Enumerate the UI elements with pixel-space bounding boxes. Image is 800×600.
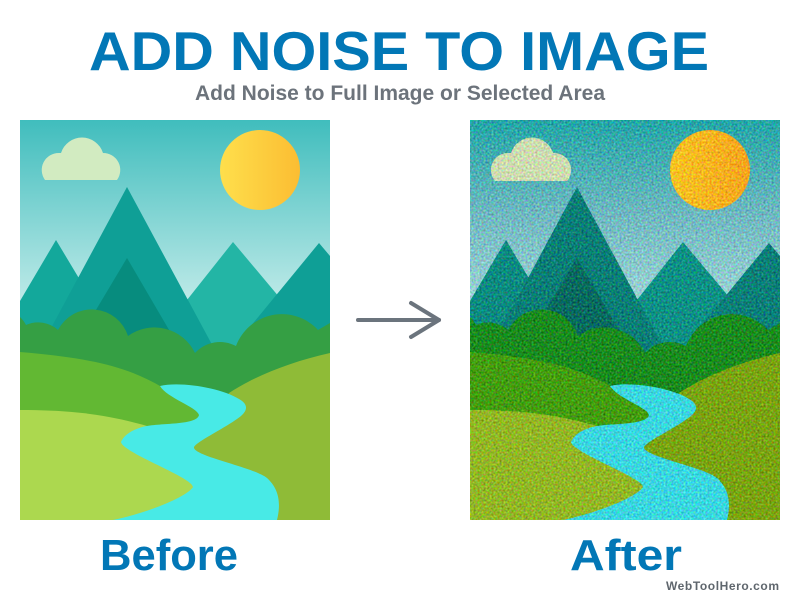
arrow [358,303,439,337]
after label: After [570,531,682,580]
title: ADD NOISE TO IMAGE [89,21,709,82]
before image: landscape [20,120,330,522]
after image: noisy landscape [470,120,780,522]
before label: Before [100,531,238,580]
subtitle: Add Noise to Full Image or Selected Area [195,82,605,105]
watermark: WebToolHero.com [666,579,779,593]
